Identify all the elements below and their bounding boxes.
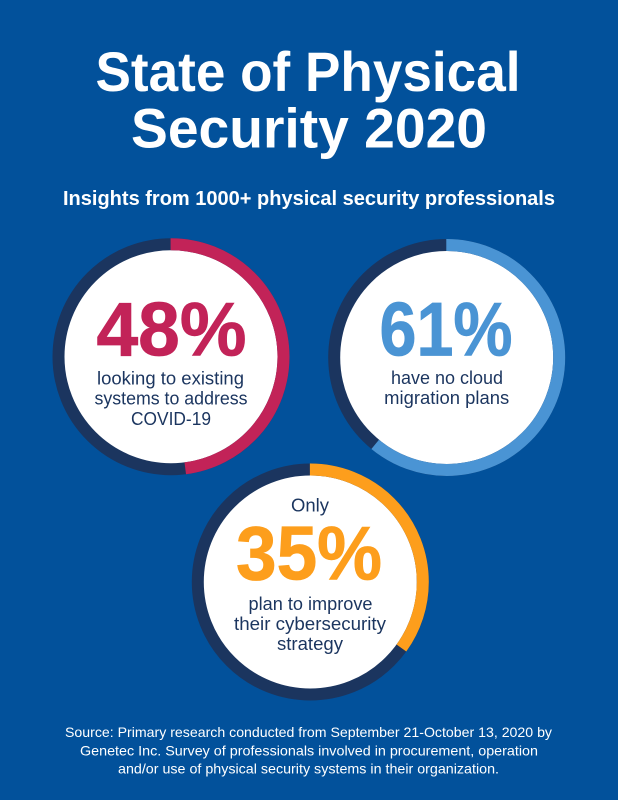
title: State of Physical (96, 40, 520, 103)
caption: 61 percent: have no cloud (391, 368, 503, 388)
subtitle: Insights from 1000+ physical security professionals (63, 188, 555, 210)
title (96, 40, 520, 160)
source note: Source: Primary research conducted from September 21-October 13, 2020 by (65, 724, 552, 740)
panel: 48 percent stat (58, 244, 284, 469)
caption: 35 percent (234, 594, 386, 654)
source note (65, 724, 552, 777)
progress arc: 48 percent (58, 244, 284, 469)
caption: 48 percent: looking to existing (97, 368, 244, 388)
caption: 48 percent: COVID-19 (131, 409, 211, 429)
source note: and/or use of physical security systems in their organization. (118, 761, 499, 777)
panel: 61 percent stat (334, 245, 559, 470)
caption: 48 percent (94, 368, 248, 429)
source note: Genetec Inc. Survey of professionals involved in procurement, operation (80, 742, 538, 758)
caption: 61 percent: migration plans (384, 388, 509, 408)
number: 35%: 35% (236, 512, 382, 596)
number: 48%: 48% (96, 288, 246, 372)
number: 61%: 61% (380, 288, 512, 372)
panel: 35 percent stat (198, 470, 423, 694)
progress arc: 61 percent (334, 245, 559, 470)
caption: 35 percent: their cybersecurity (234, 614, 386, 634)
title: Security 2020 (131, 96, 487, 160)
caption: 35 percent: plan to improve (248, 594, 372, 614)
caption: 48 percent: systems to address (94, 388, 248, 408)
caption: 35 percent: strategy (277, 634, 343, 654)
progress arc: 35 percent (198, 470, 423, 694)
caption: 61 percent (384, 368, 509, 408)
label: only: Only (291, 496, 329, 516)
